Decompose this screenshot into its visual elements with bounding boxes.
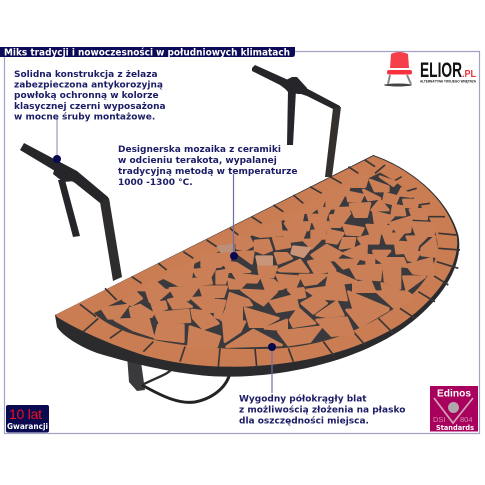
frame: [4, 52, 480, 434]
text: mosaic: tradycyjną metodą w temperaturze: [118, 167, 297, 177]
callout dot: mosaic: [230, 252, 238, 260]
table hinge and folding support: [127, 355, 230, 402]
callout line: bracket: [56, 118, 58, 159]
text: mosaic: 1000 -1300 °C.: [118, 178, 193, 188]
badge: 10 lat warranty: Gwarancji: [7, 422, 48, 431]
header bar: Miks tradycji i nowoczesności w południowych klimatach: [4, 48, 290, 58]
callout line: mosaic: [232, 174, 234, 256]
text: construction: w mocne śruby montażowe.: [14, 112, 155, 122]
logo: Elior: [384, 52, 476, 86]
badge: Edinos DSI 804 Standards: [430, 386, 478, 432]
text: tabletop: dla oszczędności miejsca.: [239, 416, 369, 426]
text: construction: Solidna konstrukcja z żelaza: [14, 70, 158, 80]
dark grout field: [95, 173, 437, 348]
text: construction: zabezpieczona antykorozyjną: [14, 81, 163, 91]
callout line: tabletop: [271, 347, 273, 393]
badge: 10 lat warranty: 10 lat: [9, 406, 42, 422]
bracket: right: [252, 65, 341, 177]
text: tabletop: z możliwością złożenia na płasko: [239, 404, 405, 416]
badge: Edinos DSI 804 Standards: 804: [460, 415, 473, 424]
terracotta border band: [56, 156, 457, 367]
band grout lines: [80, 160, 460, 367]
text: mosaic: Designerska mozaika z ceramiki: [118, 145, 281, 155]
mosaic tiles: [102, 176, 437, 347]
badge: Edinos DSI 804 Standards: Edinos: [437, 388, 471, 400]
table: mosaic half-round top: [55, 155, 460, 377]
callout dot: bracket: [53, 155, 61, 163]
badge: Edinos DSI 804 Standards: DSI: [433, 415, 446, 424]
bracket: left: [20, 143, 122, 281]
text: mosaic: w odcieniu terakota, wypalanej: [118, 156, 277, 166]
callout dot: tabletop: [268, 343, 276, 351]
badge: Edinos DSI 804 Standards: Standards: [436, 424, 474, 432]
text: construction: klasycznej czerni wyposażona: [14, 102, 166, 112]
text: tabletop: Wygodny półokrągły blat: [239, 394, 367, 404]
icon: red chair: [384, 52, 412, 86]
logo: Elior: .PL: [462, 69, 476, 80]
logo: Elior: ELIOR: [420, 59, 462, 82]
text: construction: powłoką ochronną w kolorze: [14, 91, 159, 101]
badge: 10 lat warranty: [6, 405, 49, 432]
